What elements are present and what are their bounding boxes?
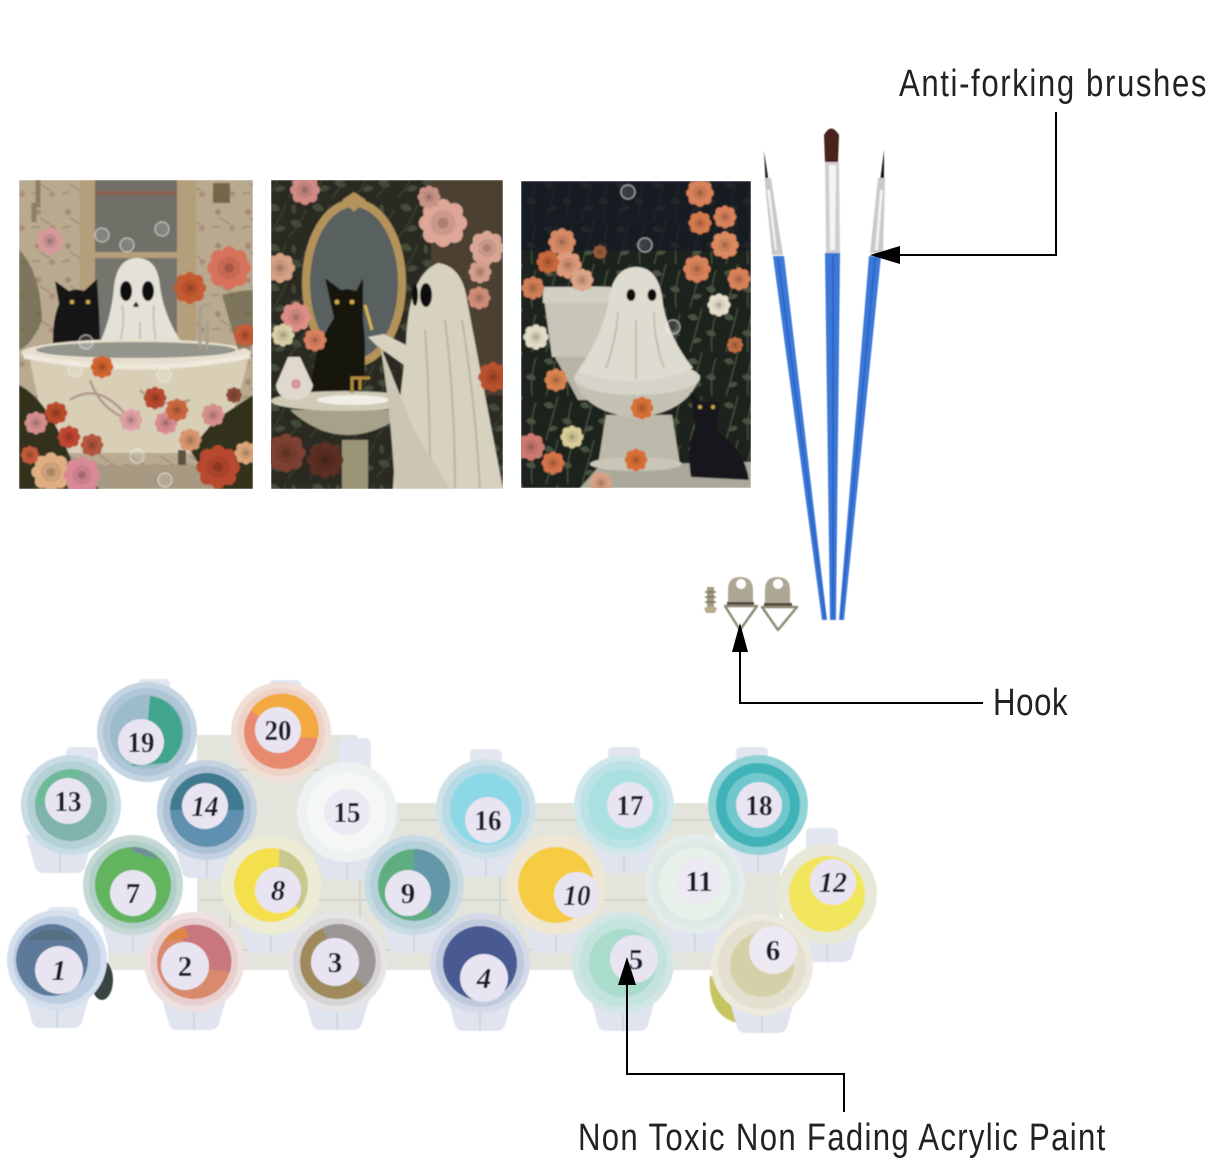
pot 1	[7, 907, 107, 1028]
flower vase	[276, 357, 313, 400]
pot 15	[297, 738, 397, 880]
pot 6: 6	[766, 935, 780, 967]
label: Anti-forking brushes: Anti-forking brushes	[899, 63, 1206, 105]
ghost in sheet	[368, 263, 503, 489]
gold oval mirror	[306, 192, 402, 363]
pot 3	[287, 912, 387, 1030]
pot 18	[708, 747, 808, 873]
pot 17: 17	[616, 790, 644, 822]
icon: sawtooth hanger hook left	[725, 577, 757, 630]
pot 16	[436, 749, 536, 877]
pot 10	[506, 835, 606, 953]
pot 17	[574, 747, 674, 873]
painting: ghost on toilet in flower garden with cat	[517, 179, 751, 494]
pot 4: 4	[476, 963, 491, 995]
toothbrush	[365, 305, 372, 330]
pot 2: 2	[178, 951, 192, 983]
pot 18: 18	[746, 790, 772, 822]
flowers	[19, 227, 258, 493]
sink	[271, 378, 419, 489]
label: Hook: Hook	[993, 682, 1068, 724]
bathtub	[21, 305, 251, 478]
pot 3: 3	[328, 947, 342, 979]
pot 16: 16	[474, 805, 502, 837]
paint brushes set	[764, 128, 885, 620]
pot 11	[645, 834, 745, 952]
pot 19: 19	[128, 727, 154, 759]
pot 8	[221, 835, 321, 953]
arrow: to brushes	[870, 112, 1056, 264]
pot 13	[21, 747, 121, 873]
window	[80, 180, 196, 350]
flowers	[265, 175, 508, 478]
pot 14	[157, 760, 257, 878]
ghost	[577, 267, 693, 381]
arrow: to hook	[732, 623, 983, 703]
flowers	[517, 179, 750, 494]
black cat	[689, 392, 749, 480]
pot 10: 10	[564, 880, 590, 912]
pot 5: 5	[629, 944, 643, 976]
toilet tank	[543, 286, 611, 400]
painting: ghost in bathtub with black cat	[19, 180, 258, 493]
pipe and frame on the wall	[34, 180, 38, 222]
pot 13: 13	[54, 786, 82, 818]
pot 15: 15	[334, 797, 360, 829]
toilet bowl and pedestal	[574, 361, 700, 471]
pot 12: 12	[819, 867, 847, 899]
pot 12	[777, 828, 877, 962]
black cat	[310, 278, 365, 397]
label: Non Toxic Non Fading Acrylic Paint: Non Toxic Non Fading Acrylic Paint	[578, 1117, 1106, 1159]
arrow: to paint pot	[618, 957, 844, 1112]
pot 14: 14	[192, 791, 218, 823]
icon: screw	[704, 587, 717, 613]
pot 2	[144, 912, 244, 1030]
paint pots set	[7, 679, 877, 1033]
pot 1: 1	[52, 955, 66, 987]
middle flat brush	[824, 128, 840, 620]
pot 6	[710, 914, 813, 1033]
pot 11: 11	[686, 866, 712, 898]
right brush	[839, 150, 885, 620]
pot 20	[231, 680, 331, 782]
pot 9	[364, 835, 464, 953]
pot 20: 20	[264, 715, 292, 747]
black cat	[53, 279, 100, 349]
pot 9: 9	[401, 878, 415, 910]
icon: sawtooth hanger hook right	[762, 577, 797, 630]
left brush	[764, 151, 827, 620]
tray	[91, 735, 780, 1000]
soap bubbles	[68, 222, 172, 487]
pot 8: 8	[271, 875, 286, 907]
pot 5	[572, 912, 674, 1031]
pot 7	[83, 835, 183, 953]
ghost	[100, 257, 180, 341]
pot 4	[430, 913, 530, 1031]
pot 7: 7	[126, 878, 140, 910]
painting: ghost brushing teeth at mirror with cat	[265, 175, 508, 489]
floor	[97, 464, 214, 489]
pot 19	[97, 679, 197, 782]
